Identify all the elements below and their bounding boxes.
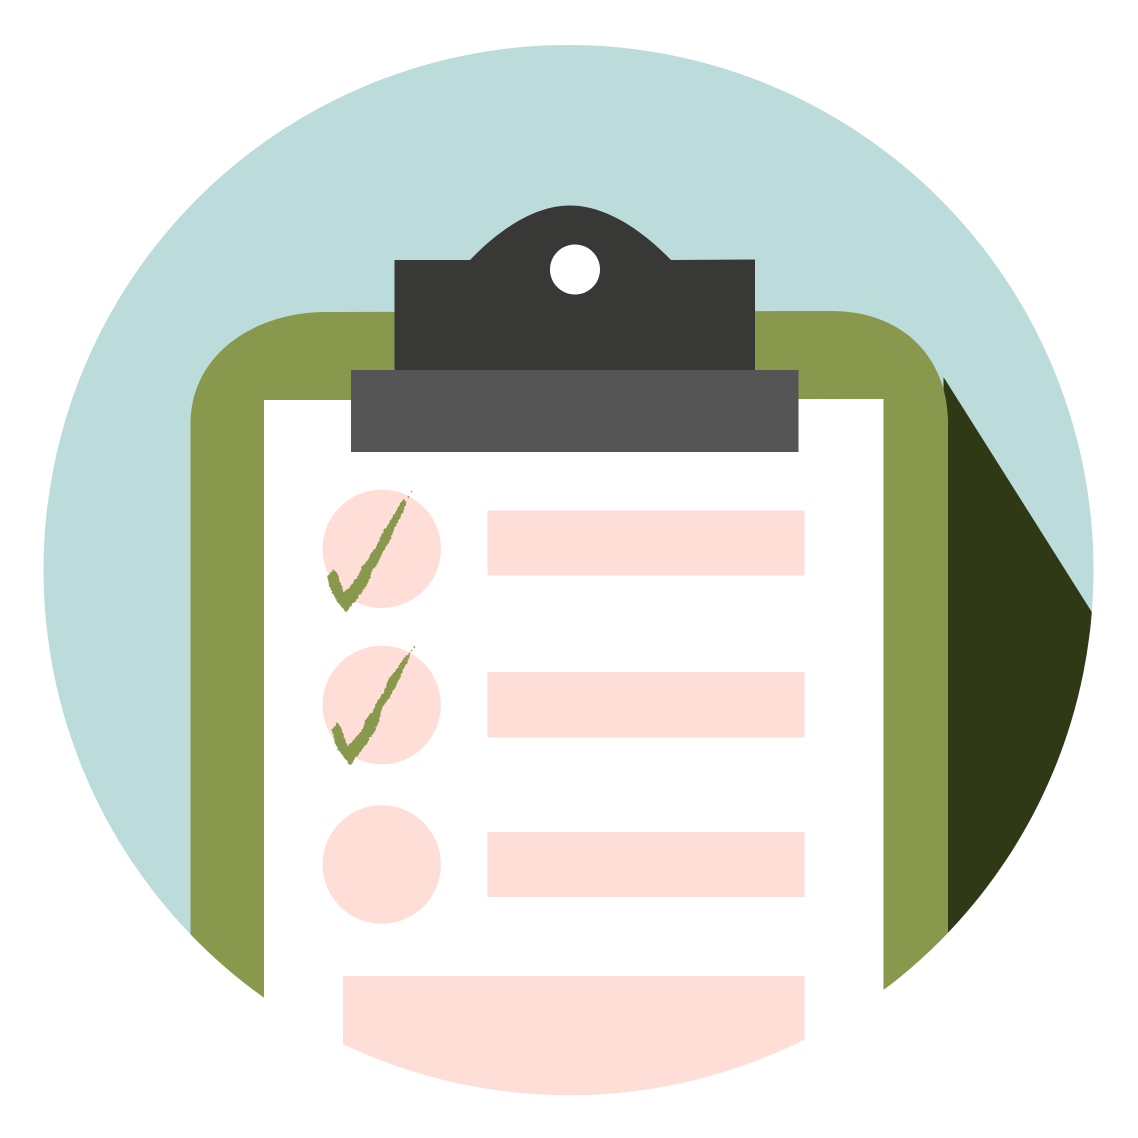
check mark 1 [328, 491, 412, 611]
text bar 3 [488, 832, 804, 897]
checklist row 2 [322, 645, 804, 764]
paper sheet [264, 399, 884, 1138]
text bar 2 [488, 672, 804, 738]
clipped clipboard group [190, 311, 1092, 998]
bottom pink bar [343, 976, 804, 1095]
checklist row 1 [322, 490, 804, 611]
bullet circle 2 [322, 646, 441, 764]
bullet circle 1 [322, 490, 441, 608]
clipboard board [190, 311, 948, 998]
clip hole [550, 244, 600, 294]
clip base [351, 370, 798, 452]
checklist row 3 [322, 805, 804, 924]
check mark 2 [333, 645, 415, 763]
text bar 1 [488, 510, 804, 576]
clip top [394, 206, 755, 370]
long shadow [944, 377, 1092, 933]
bullet circle 3 [322, 805, 441, 924]
